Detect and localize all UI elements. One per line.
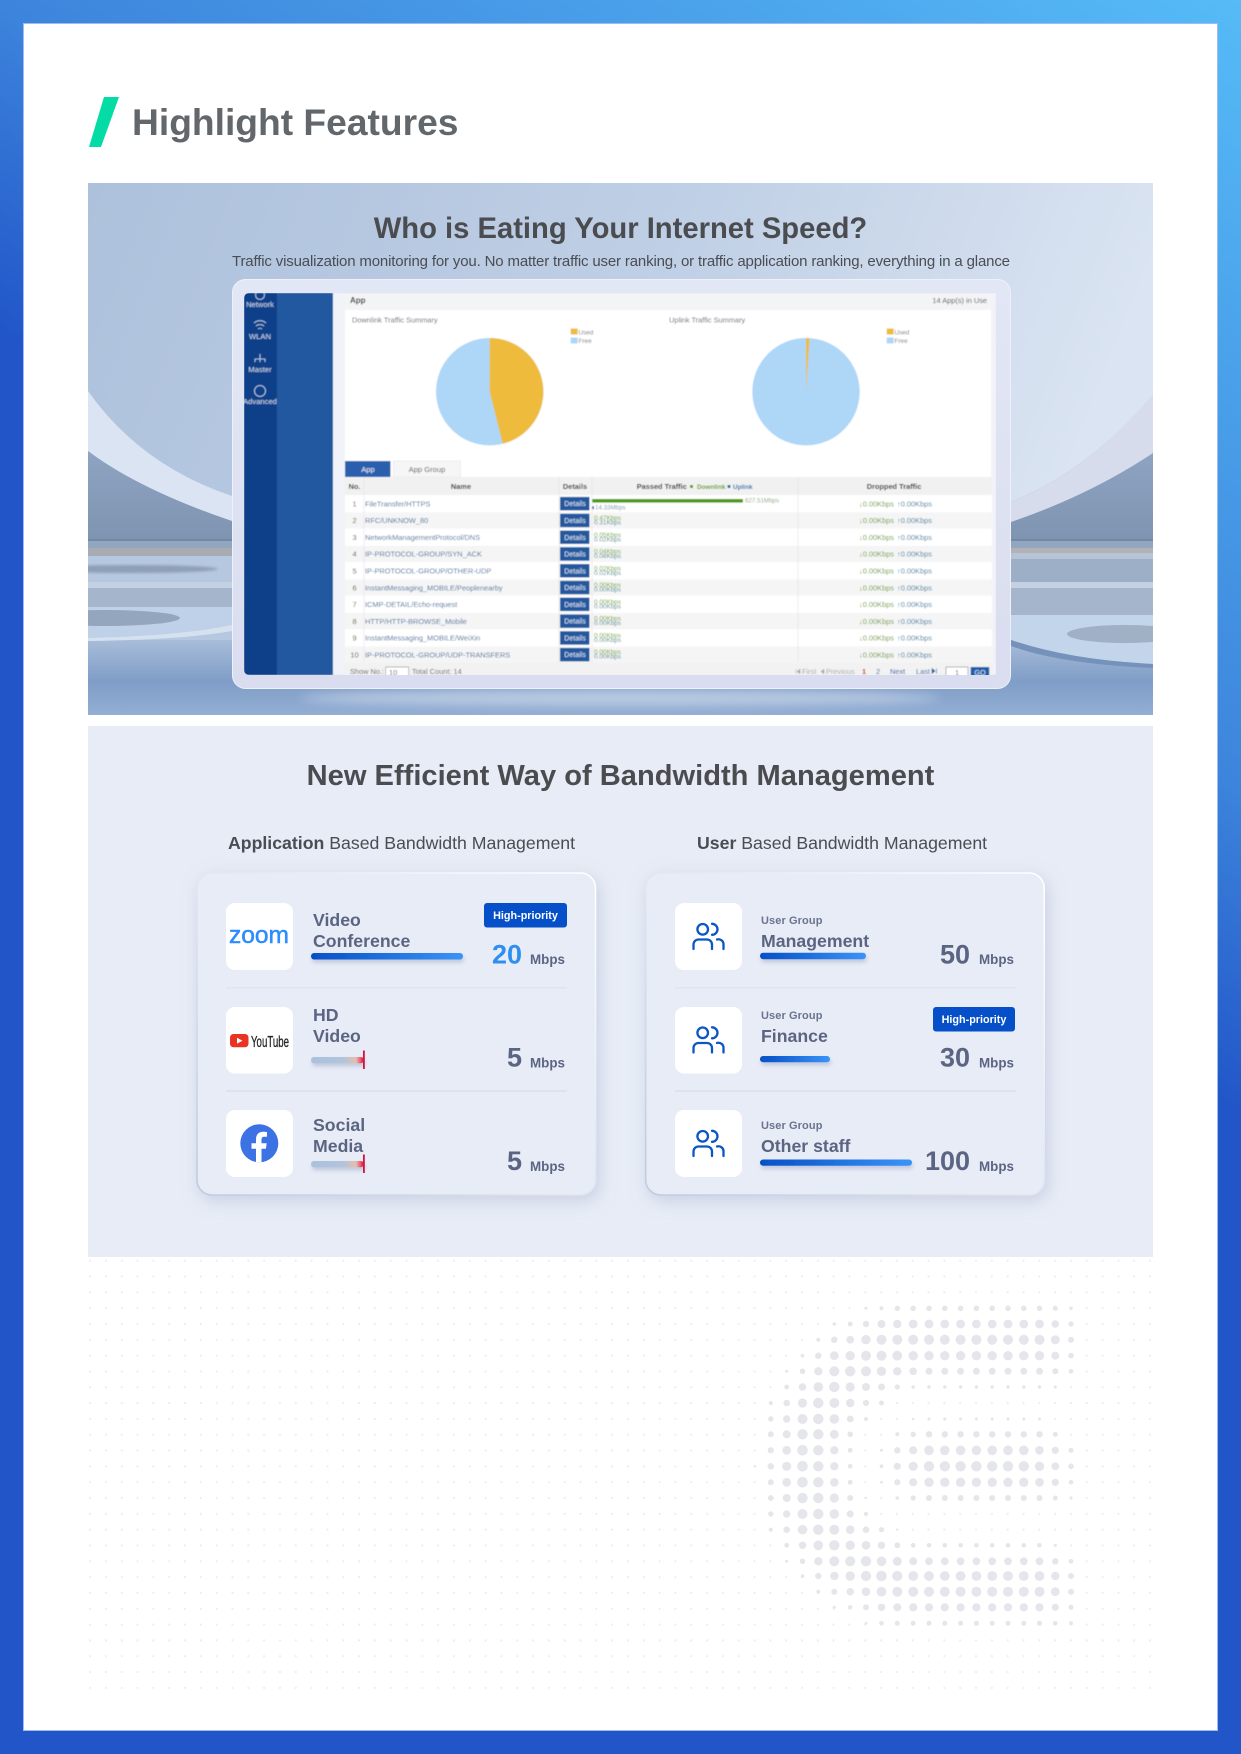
row: finance: Finance: [761, 1026, 828, 1046]
content area: [345, 310, 991, 477]
row: finance: Mbps: [979, 1056, 1014, 1070]
bandwidth limit bar: [311, 1050, 365, 1069]
device frame with traffic dashboard screenshot: [232, 280, 1010, 688]
table rows: ↓0.00Kbps: [859, 634, 894, 643]
label: User Group: [761, 1120, 823, 1132]
table rows: ↓0.00Kbps: [859, 583, 894, 592]
icon: wifi: [254, 321, 266, 329]
table rows: 3: [352, 533, 357, 542]
panel background scene: [30, 183, 1183, 715]
table footer pagination: Total Count: 14: [412, 667, 462, 676]
table rows: ↓0.00Kbps: [859, 550, 894, 559]
pie chart: downlink traffic summary: Free: [578, 338, 592, 345]
pie chart: uplink traffic summary: Uplink Traffic Summary: [669, 316, 746, 324]
table footer pagination: Last: [916, 667, 930, 676]
table rows: 0.00Kbps: [594, 582, 621, 589]
label: Video: [313, 910, 361, 930]
table rows: 0.08Kbps: [594, 553, 621, 560]
table rows: ↓0.00Kbps: [859, 533, 894, 542]
table rows: 6: [352, 583, 357, 592]
table rows: ICMP-DETAIL/Echo-request: [365, 600, 457, 609]
sidebar navigation: Advanced: [243, 397, 277, 406]
icon: youtube logo: YouTube: [251, 1034, 289, 1051]
table rows: IP-PROTOCOL-GROUP/UDP-TRANSFERS: [365, 650, 510, 659]
table footer pagination: [345, 663, 991, 675]
tabs: App Group: [409, 465, 445, 474]
table footer pagination: 1: [862, 667, 866, 676]
value: 50: [940, 940, 970, 970]
tabs: App: [361, 465, 375, 474]
table rows: Details: [564, 501, 586, 508]
table header: [345, 477, 992, 495]
table rows: 14.33Mbps: [595, 504, 626, 511]
heading text: Highlight Features: [132, 101, 458, 143]
row: social media: Media: [313, 1136, 363, 1156]
value: 30: [940, 1042, 970, 1072]
table rows: ↑0.00Kbps: [897, 566, 932, 575]
table rows: ↓0.00Kbps: [859, 566, 894, 575]
table rows: 5: [352, 566, 357, 575]
badge: high priority: [933, 1007, 1015, 1032]
bandwidth bar: [760, 1160, 912, 1166]
row: video conference: Conference: [313, 931, 410, 951]
value: 100: [925, 1146, 970, 1176]
table rows: ↑0.00Kbps: [897, 533, 932, 542]
table footer pagination: Previous: [826, 667, 855, 676]
table rows: 0.02Kbps: [594, 570, 621, 577]
pie chart: downlink traffic summary: Used: [578, 330, 594, 336]
table footer pagination: GO: [974, 668, 986, 677]
table header: Uplink: [733, 484, 753, 491]
badge: high priority: High-priority: [493, 910, 558, 922]
table header: Name: [451, 482, 471, 491]
table rows: 0.00Kbps: [594, 587, 621, 594]
row: video conference: [226, 903, 567, 970]
content header bar: 14 App(s) in Use: [932, 296, 987, 305]
table footer pagination: Show No.:: [350, 667, 384, 676]
table rows: Details: [564, 636, 586, 642]
icon: youtube logo: [226, 1007, 293, 1074]
table rows: 0.00Kbps: [594, 599, 621, 606]
icon: gear: [254, 386, 266, 396]
table header: Dropped Traffic: [867, 482, 921, 491]
table rows: 627.51Mbps: [745, 498, 779, 505]
table rows: IP-PROTOCOL-GROUP/OTHER-UDP: [365, 566, 491, 575]
icon: green slash accent: [89, 97, 119, 147]
sidebar navigation: Network: [246, 300, 274, 309]
table rows: Details: [564, 518, 586, 525]
table rows: 1: [352, 499, 357, 508]
pie chart: uplink traffic summary: [669, 316, 910, 445]
row: hd video: Mbps: [530, 1056, 565, 1070]
panel heading: Who is Eating Your Internet Speed?: [374, 213, 867, 245]
row: social media: [226, 1110, 565, 1177]
table rows: 0.02Kbps: [594, 536, 621, 543]
table rows: Details: [564, 652, 586, 659]
icon: master: [255, 354, 265, 362]
dashboard screenshot: [243, 290, 996, 679]
label: User Group: [761, 915, 823, 927]
row: other staff: Other staff: [761, 1136, 851, 1156]
row: management: Management: [761, 931, 869, 951]
row: social media: Mbps: [530, 1159, 565, 1174]
table footer pagination: Next: [890, 667, 905, 676]
table rows: 0.02Kbps: [594, 565, 621, 572]
label: HD: [313, 1005, 339, 1025]
table header: No.: [349, 482, 360, 491]
table rows: 2: [352, 516, 357, 525]
decorative halftone dot pattern: [88, 1258, 1153, 1690]
table rows: Details: [564, 552, 586, 558]
icon: network: [256, 290, 264, 300]
section title: Highlight Features: [89, 97, 458, 147]
table rows: 0.31Kbps: [594, 520, 621, 526]
table rows: Details: [564, 602, 586, 609]
table rows: ↑0.00Kbps: [897, 516, 932, 525]
table rows: 0.00Kbps: [594, 616, 621, 623]
table rows: Details: [564, 585, 586, 592]
content header bar: App: [350, 296, 366, 305]
row: video conference: Mbps: [530, 952, 565, 967]
table rows: 0.00Kbps: [594, 649, 621, 656]
table rows: ↑0.00Kbps: [897, 650, 932, 659]
tabs: [345, 461, 460, 477]
table rows: FileTransfer/HTTPS: [365, 499, 430, 508]
table rows: NetworkManagementProtocol/DNS: [365, 533, 480, 542]
table header: Downlink: [697, 484, 726, 491]
table rows: 0.00Kbps: [594, 632, 621, 640]
table header: Passed Traffic: [637, 482, 687, 491]
row: hd video: [226, 1005, 565, 1074]
table rows: IP-PROTOCOL-GROUP/SYN_ACK: [365, 550, 482, 559]
table footer pagination: 2: [876, 667, 880, 676]
pie chart: downlink traffic summary: Downlink Traffic Summary: [352, 316, 438, 324]
table rows: 0.47Kbps: [594, 515, 621, 522]
sidebar navigation: Master: [248, 365, 272, 374]
table rows: ↓0.00Kbps: [859, 600, 894, 609]
label: Social: [313, 1115, 365, 1135]
icon: users: [675, 1007, 742, 1074]
content header bar: [345, 293, 991, 310]
subheading: user based: User Based Bandwidth Management: [697, 833, 987, 853]
row: management: Mbps: [979, 952, 1014, 967]
badge: high priority: [484, 903, 567, 928]
table rows: RFC/UNKNOW_80: [365, 516, 428, 525]
row: management: [675, 903, 1014, 970]
table rows: ↑0.00Kbps: [897, 583, 932, 592]
table rows: ↓0.00Kbps: [859, 516, 894, 525]
table rows: ↓0.00Kbps: [859, 650, 894, 659]
panel: who is eating your internet speed: [30, 183, 1183, 715]
table rows: 9: [352, 634, 357, 643]
badge: high priority: High-priority: [942, 1014, 1006, 1026]
table rows: 0.00Kbps: [594, 603, 621, 610]
value: 5: [507, 1042, 522, 1072]
panel subtitle: Traffic visualization monitoring for you. No matter traffic user ranking, or traffic application ranking, everything in a glance: [232, 253, 1010, 270]
table rows: Details: [564, 535, 586, 542]
table rows: ↓0.00Kbps: [859, 617, 894, 626]
panel: new efficient way of bandwidth management: [88, 726, 1153, 1257]
row: other staff: [675, 1110, 1014, 1177]
table footer pagination: 10: [389, 668, 397, 677]
label: User Group: [761, 1010, 823, 1022]
bandwidth bar: [760, 953, 866, 959]
table rows: 10: [350, 650, 359, 659]
table rows: 0.04Kbps: [594, 548, 621, 556]
bandwidth bar: [760, 1056, 830, 1062]
pie chart: uplink traffic summary: Used: [894, 330, 910, 336]
table rows: 0.05Kbps: [594, 532, 621, 539]
table rows: Details: [564, 619, 586, 626]
card: user based management: [646, 873, 1044, 1195]
row: other staff: Mbps: [979, 1159, 1014, 1174]
table rows: ↑0.00Kbps: [897, 600, 932, 609]
icon: users: [675, 1110, 742, 1177]
icon: zoom logo: [226, 903, 293, 970]
table footer pagination: First: [802, 667, 816, 676]
sidebar navigation: [243, 290, 333, 675]
row: hd video: Video: [313, 1026, 361, 1046]
panel heading: New Efficient Way of Bandwidth Management: [307, 760, 935, 792]
table rows: 0.00Kbps: [594, 620, 621, 627]
table rows: ↑0.00Kbps: [897, 499, 932, 508]
table rows: InstantMessaging_MOBILE/Peoplenearby: [365, 583, 503, 592]
bandwidth limit bar: [311, 1154, 365, 1173]
table rows: 7: [352, 600, 357, 609]
icon: facebook logo: [226, 1110, 293, 1177]
table rows: HTTP/HTTP-BROWSE_Mobile: [365, 617, 467, 626]
table rows: ↓0.00Kbps: [859, 499, 894, 508]
value: 20: [492, 940, 522, 970]
table rows: 4: [352, 550, 357, 559]
table rows: ↑0.00Kbps: [897, 634, 932, 643]
pie chart: uplink traffic summary: Free: [894, 338, 908, 345]
table rows: Details: [564, 568, 586, 575]
pie chart: downlink traffic summary: [352, 316, 594, 445]
table rows: 0.00Kbps: [594, 637, 621, 644]
table rows: [345, 477, 992, 663]
icon: users: [675, 903, 742, 970]
row: finance: [675, 1007, 1015, 1074]
table rows: InstantMessaging_MOBILE/WeiXin: [365, 634, 480, 643]
subheading: application based: Application Based Bandwidth Management: [228, 833, 575, 853]
sidebar navigation: WLAN: [249, 332, 271, 341]
icon: zoom logo: zoom: [229, 922, 289, 949]
table rows: ↑0.00Kbps: [897, 617, 932, 626]
table footer pagination: 1: [955, 668, 959, 677]
bandwidth bar: [311, 953, 463, 960]
table rows: ↑0.00Kbps: [897, 550, 932, 559]
table header: Details: [563, 482, 587, 491]
table rows: 0.00Kbps: [594, 654, 621, 661]
value: 5: [507, 1146, 522, 1176]
card: application based management: [197, 873, 596, 1195]
table rows: 8: [352, 617, 357, 626]
